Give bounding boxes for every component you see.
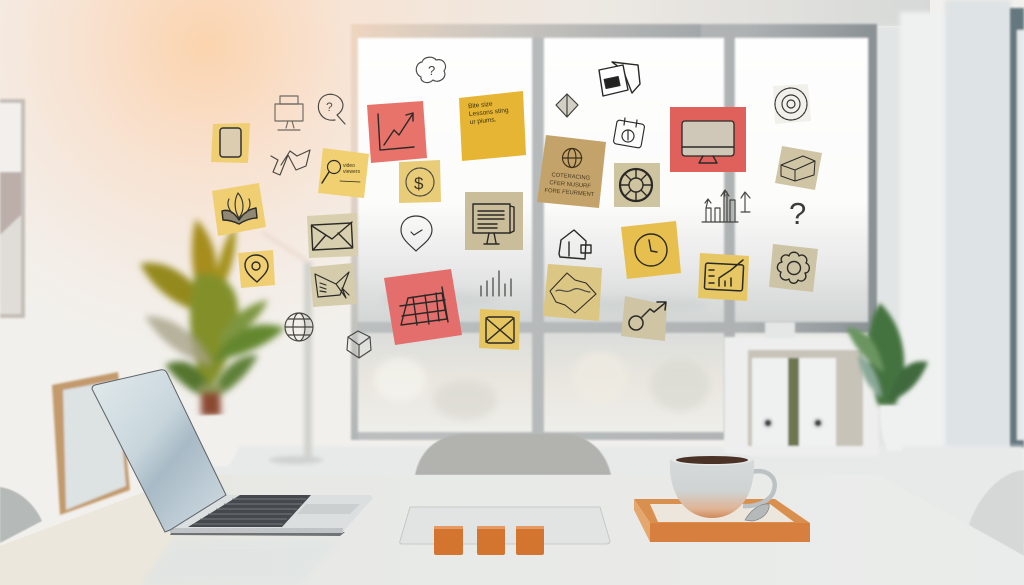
note: yellow text: Bite size <box>468 101 493 110</box>
shelf with binders <box>724 322 879 456</box>
note: red grid chart <box>384 269 462 345</box>
note: red growth chart <box>367 101 427 163</box>
icon: calendar <box>613 118 645 148</box>
floor lamp <box>262 232 323 464</box>
coffee cup <box>670 452 775 518</box>
note: book leaf <box>212 183 266 236</box>
note: key arrow <box>621 296 667 341</box>
icon: cube <box>347 331 371 358</box>
right window <box>1010 8 1024 448</box>
floor <box>150 446 1024 566</box>
icon: question mark: ? <box>789 196 806 231</box>
note: clock <box>621 221 681 279</box>
icon: arrows scribble <box>271 150 310 175</box>
icon: house with tag <box>559 230 591 259</box>
note: dollar badge: $ <box>414 174 424 193</box>
left wall art <box>0 99 25 318</box>
floating sticky notes and icons <box>211 57 822 358</box>
note: phone <box>211 123 250 163</box>
right chair <box>969 470 1024 556</box>
note: dollar badge <box>399 160 441 203</box>
note: envelope <box>307 213 358 258</box>
note: yellow text <box>459 91 526 161</box>
note: dial on pale square <box>773 84 811 124</box>
icon: bar chart arrows <box>702 190 750 222</box>
table reflections <box>140 540 340 585</box>
note: dashboard chart <box>698 253 749 301</box>
icon: diamond <box>556 94 578 117</box>
right plant <box>846 303 928 405</box>
icon: check pin <box>401 216 432 251</box>
tray <box>634 499 810 542</box>
centre chair <box>415 434 611 475</box>
note: wheel <box>614 163 660 207</box>
leaning frame <box>52 372 130 515</box>
note: magnifier text: viewers <box>343 169 360 175</box>
left plant pot <box>190 414 243 466</box>
icon: bar chart lines <box>481 271 511 296</box>
right plant pot <box>880 406 911 451</box>
orange cubes <box>434 526 544 555</box>
icon: cloud question: ? <box>428 63 435 78</box>
left plant <box>140 219 285 416</box>
spoon <box>745 504 769 521</box>
note: map puzzle <box>543 264 602 321</box>
left chair <box>0 487 42 543</box>
note: brown globe text: COTERACING <box>551 172 591 182</box>
mouse pad <box>400 507 610 544</box>
icon: desktop printer <box>275 96 303 130</box>
table warm left area <box>0 475 225 585</box>
note: magnifier text <box>318 148 369 198</box>
blurred city outside window <box>374 292 710 420</box>
icon: cloud question <box>416 57 446 83</box>
note: red monitor <box>670 107 746 172</box>
icon: cards <box>599 62 640 96</box>
note: tan monitor <box>465 192 523 250</box>
icon: magnifier question <box>318 94 345 124</box>
icon: globe <box>285 313 313 341</box>
laptop <box>92 370 373 536</box>
note: brown globe text: CFER NUSURF <box>549 180 591 190</box>
note: map pin <box>238 250 275 288</box>
note: envelope with cursor <box>310 263 357 307</box>
note: tan box <box>775 146 822 190</box>
note: magnifier text: video <box>343 163 355 169</box>
note: yellow text: Lessons sting <box>469 107 509 118</box>
note: yellow text: ur piums. <box>469 116 497 126</box>
icon: magnifier question: ? <box>326 100 333 114</box>
note: yellow envelope <box>479 309 520 350</box>
table <box>0 475 1024 585</box>
note: gear <box>769 244 818 292</box>
note: brown globe text <box>537 135 606 208</box>
note: brown globe text: FORE FEURMENT <box>544 188 595 198</box>
main window <box>351 24 877 440</box>
